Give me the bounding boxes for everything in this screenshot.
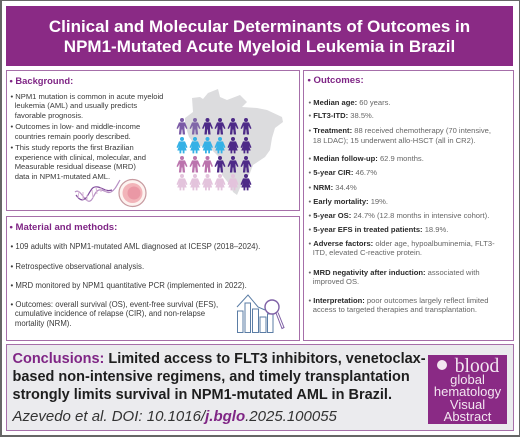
- title banner: [6, 6, 513, 66]
- panel: material and methods: • 109 adults with NPM1-mutated AML diagnosed at ICESP (2018–2024).: [10, 242, 260, 250]
- panel: background: [6, 70, 300, 211]
- logo text: hematology: [434, 384, 501, 399]
- panel: outcomes: ITD, elevated C-reactive protein.: [313, 248, 422, 257]
- text: background bullets: experience with clinical, molecular, and: [15, 153, 146, 162]
- text: background bullets: • NPM1 mutation is common in acute myeloid: [10, 92, 163, 100]
- panel: outcomes: • Interpretation: poor outcomes largely reflect limited: [308, 296, 488, 304]
- title banner: NPM1-Mutated Acute Myeloid Leukemia in Brazil: [64, 37, 455, 56]
- panel: outcomes: • NRM: 34.4%: [308, 182, 357, 192]
- heading: outcomes: • Outcomes:: [308, 74, 364, 86]
- panel: outcomes: 18 LDAC); 15 underwent allo-HSCT (all in CR2).: [313, 136, 476, 145]
- panel: conclusions: [6, 344, 514, 431]
- panel: material and methods: cumulative incidence of relapse (CIR), and non-relapse: [15, 309, 205, 318]
- text: background bullets: [10, 92, 163, 181]
- map of Brazil: [185, 89, 283, 195]
- panel: material and methods: • Retrospective observational analysis.: [10, 262, 144, 270]
- bars: [238, 303, 273, 332]
- trend line: [237, 295, 265, 310]
- DNA: [75, 180, 120, 201]
- title banner: Clinical and Molecular Determinants of Outcomes in: [49, 17, 470, 36]
- text: background bullets: Measurable residual disease (MRD): [15, 162, 136, 171]
- text: background bullets: leukemia (AML) and usually predicts: [15, 101, 137, 110]
- panel: outcomes: • Adverse factors: older age, hypoalbuminemia, FLT3-: [308, 238, 495, 248]
- pictogram row 1: [176, 118, 200, 134]
- text: background bullets: countries remain poorly described. • This study reports the first Brazilian: [10, 132, 134, 152]
- icon: DNA strand and cell: [74, 178, 147, 208]
- panel: material and methods: • Outcomes: overall survival (OS), event-free survival (EFS),: [10, 300, 218, 308]
- citation: Azevedo et al. DOI: 10.1016/j.bglo.2025.100055: [12, 408, 337, 425]
- outcome items: [308, 98, 495, 314]
- heading: background: • Background:: [10, 74, 73, 86]
- logo text: global: [450, 372, 485, 387]
- logo text: Visual: [450, 397, 485, 412]
- panel: outcomes: • Median age: 60 years.: [308, 98, 391, 107]
- text: conclusions: based non-intensive regimens, and timely transplantation: [12, 369, 410, 385]
- panel: outcomes: • FLT3-ITD: 38.5%.: [308, 110, 374, 120]
- panel: outcomes: • 5-year CIR: 46.7%: [308, 168, 377, 176]
- panel: outcomes: • 5-year OS: 24.7% (12.8 months in intensive cohort).: [308, 210, 489, 220]
- text: conclusions: strongly limits survival in NPM1-mutated AML in Brazil.: [12, 387, 392, 403]
- panel: outcomes: • Median follow-up: 62.9 months.: [308, 154, 424, 162]
- text: conclusions: [12, 351, 426, 403]
- panel: outcomes: • Treatment: 88 received chemotherapy (70 intensive,: [308, 126, 491, 135]
- logo: blood global hematology visual abstract: [428, 355, 507, 424]
- panel: outcomes: • MRD negativity after induction: associated with: [308, 268, 480, 276]
- logo text: Abstract: [444, 409, 491, 424]
- panel: material and methods: mortality (NRM).: [15, 319, 72, 328]
- panel: outcomes: • 5-year EFS in treated patients: 18.9%.: [308, 224, 448, 234]
- icon: bar chart with magnifying glass: [236, 294, 285, 333]
- panel: outcomes: improved OS.: [313, 277, 359, 286]
- logo drop: [437, 360, 447, 370]
- heading: material and methods: • Material and methods:: [10, 222, 117, 233]
- text: background bullets: favorable prognosis. • Outcomes in low- and middle-income: [10, 111, 140, 131]
- panel: outcomes: • Early mortality: 19%.: [308, 197, 388, 206]
- text: methods bullets: [10, 242, 260, 328]
- pictogram row 2: [176, 137, 226, 153]
- panel: outcomes: [303, 70, 514, 341]
- icon: map of Brazil with people pictogram: [176, 89, 283, 195]
- panel: outcomes: access to targeted therapies and transplantation.: [313, 305, 477, 314]
- logo text: [434, 372, 502, 424]
- blood wordmark: blood: [455, 356, 499, 376]
- text: outcomes bullets: [308, 98, 495, 314]
- panel: material and methods: [6, 216, 300, 341]
- cell: [119, 180, 146, 206]
- pictogram row 3: [176, 156, 213, 172]
- panel: material and methods: • MRD monitored by NPM1 quantitative PCR (implemented in 2022).: [10, 280, 247, 290]
- text: background bullets: data in NPM1-mutated AML.: [15, 172, 110, 181]
- magnifier: [265, 300, 284, 328]
- pictogram row 4: [176, 174, 238, 190]
- text: conclusions: Conclusions: Limited access to FLT3 inhibitors, venetoclax-: [12, 351, 426, 367]
